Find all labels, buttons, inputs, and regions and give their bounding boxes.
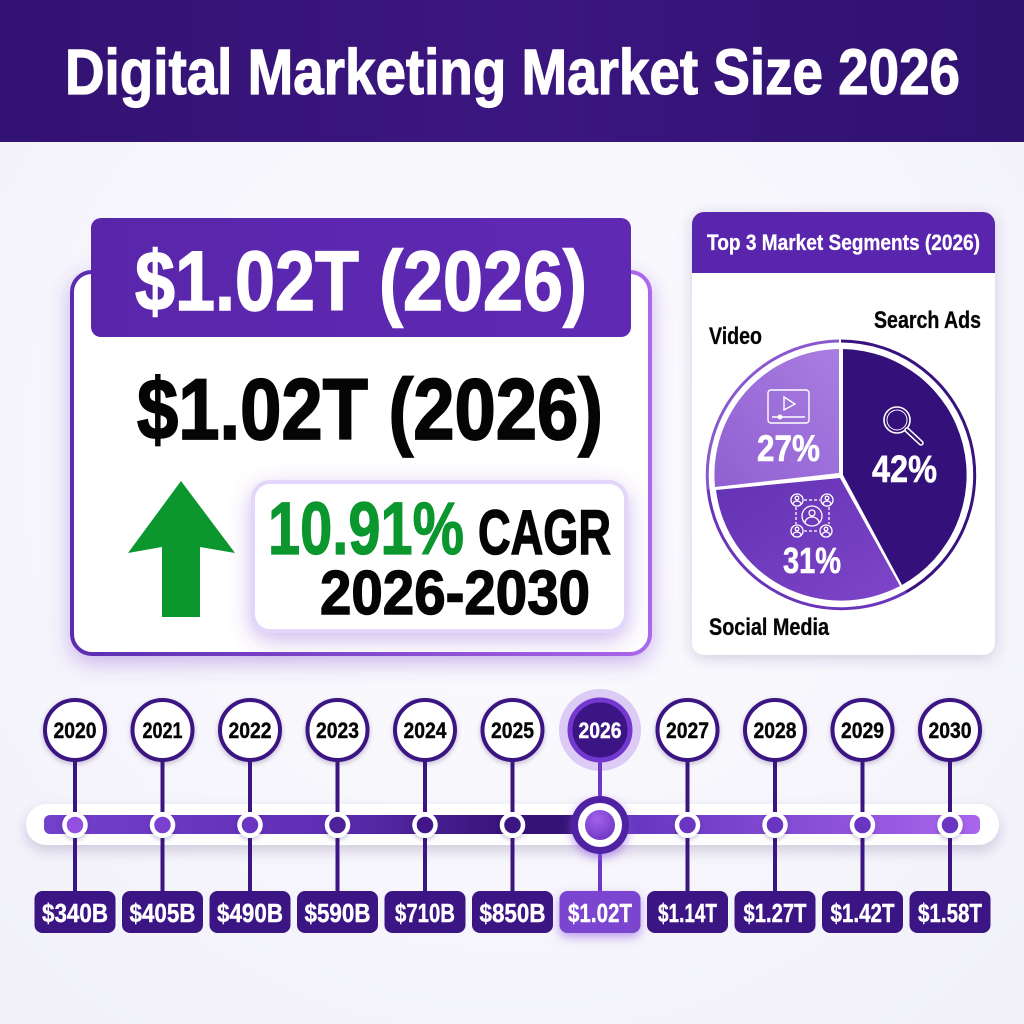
main card frame — [72, 272, 650, 654]
year labels: 2030 — [928, 718, 972, 743]
CAGR callout — [253, 482, 626, 631]
wedge: search ads — [843, 349, 967, 585]
label: video: Video — [709, 323, 762, 350]
headline band — [91, 218, 631, 337]
value labels: $1.02T — [568, 898, 632, 928]
wedge: social media — [716, 478, 900, 601]
year labels: 2024 — [404, 718, 447, 743]
value labels: $1.14T — [658, 898, 717, 928]
value: 42%: 42% — [872, 449, 937, 491]
icon: magnifier — [884, 407, 921, 443]
highlighted year marker 2026 — [559, 689, 641, 771]
value labels: $1.58T — [918, 898, 982, 928]
timeline — [26, 689, 999, 933]
year labels: 2028 — [754, 718, 796, 743]
label: social media: Social Media — [709, 614, 830, 641]
timeline nodes — [64, 814, 960, 836]
value labels: $340B — [42, 898, 108, 928]
value labels: $850B — [480, 898, 546, 928]
icon: green up arrow — [128, 481, 235, 617]
year labels: 2021 — [142, 718, 182, 743]
panel: market size headline — [72, 218, 650, 654]
value labels: $1.42T — [830, 898, 895, 928]
icon: social network — [791, 494, 833, 537]
outer ring — [841, 341, 975, 592]
year labels: 2023 — [316, 718, 359, 743]
highlighted stem 2026 — [598, 762, 602, 892]
wedge: video — [714, 349, 839, 487]
value: 27%: 27% — [757, 428, 820, 469]
value labels: $590B — [304, 898, 370, 928]
value labels: $405B — [130, 898, 196, 928]
year labels: 2027 — [666, 718, 709, 743]
timeline track — [26, 804, 999, 845]
year markers — [45, 700, 980, 760]
year labels: 2026 — [578, 718, 622, 743]
panel heading: Top 3 Market Segments (2026) — [707, 230, 980, 255]
value labels — [42, 898, 982, 928]
CAGR callout: 2026-2030 — [320, 559, 590, 628]
title banner — [0, 0, 1024, 142]
value boxes — [34, 891, 990, 933]
icon: video player — [768, 390, 809, 423]
CAGR callout: CAGR — [478, 498, 611, 568]
CAGR callout: 10.91% — [268, 487, 464, 570]
connector stems — [75, 760, 950, 892]
value labels: $1.27T — [744, 898, 807, 928]
panel heading — [692, 212, 995, 273]
value labels: $710B — [395, 898, 455, 928]
value: 31%: 31% — [783, 540, 841, 581]
panel: top 3 market segments — [692, 212, 995, 655]
pie chart — [707, 341, 975, 609]
highlighted node 2026 — [571, 796, 629, 854]
year labels — [54, 718, 972, 743]
headline band: $1.02T (2026) — [135, 234, 587, 328]
market size value: $1.02T (2026) — [137, 362, 603, 458]
year labels: 2025 — [491, 718, 534, 743]
year labels: 2022 — [228, 718, 272, 743]
year labels: 2020 — [54, 718, 96, 743]
label: search ads: Search Ads — [874, 307, 981, 334]
value labels: $490B — [217, 898, 283, 928]
year labels: 2029 — [841, 718, 884, 743]
